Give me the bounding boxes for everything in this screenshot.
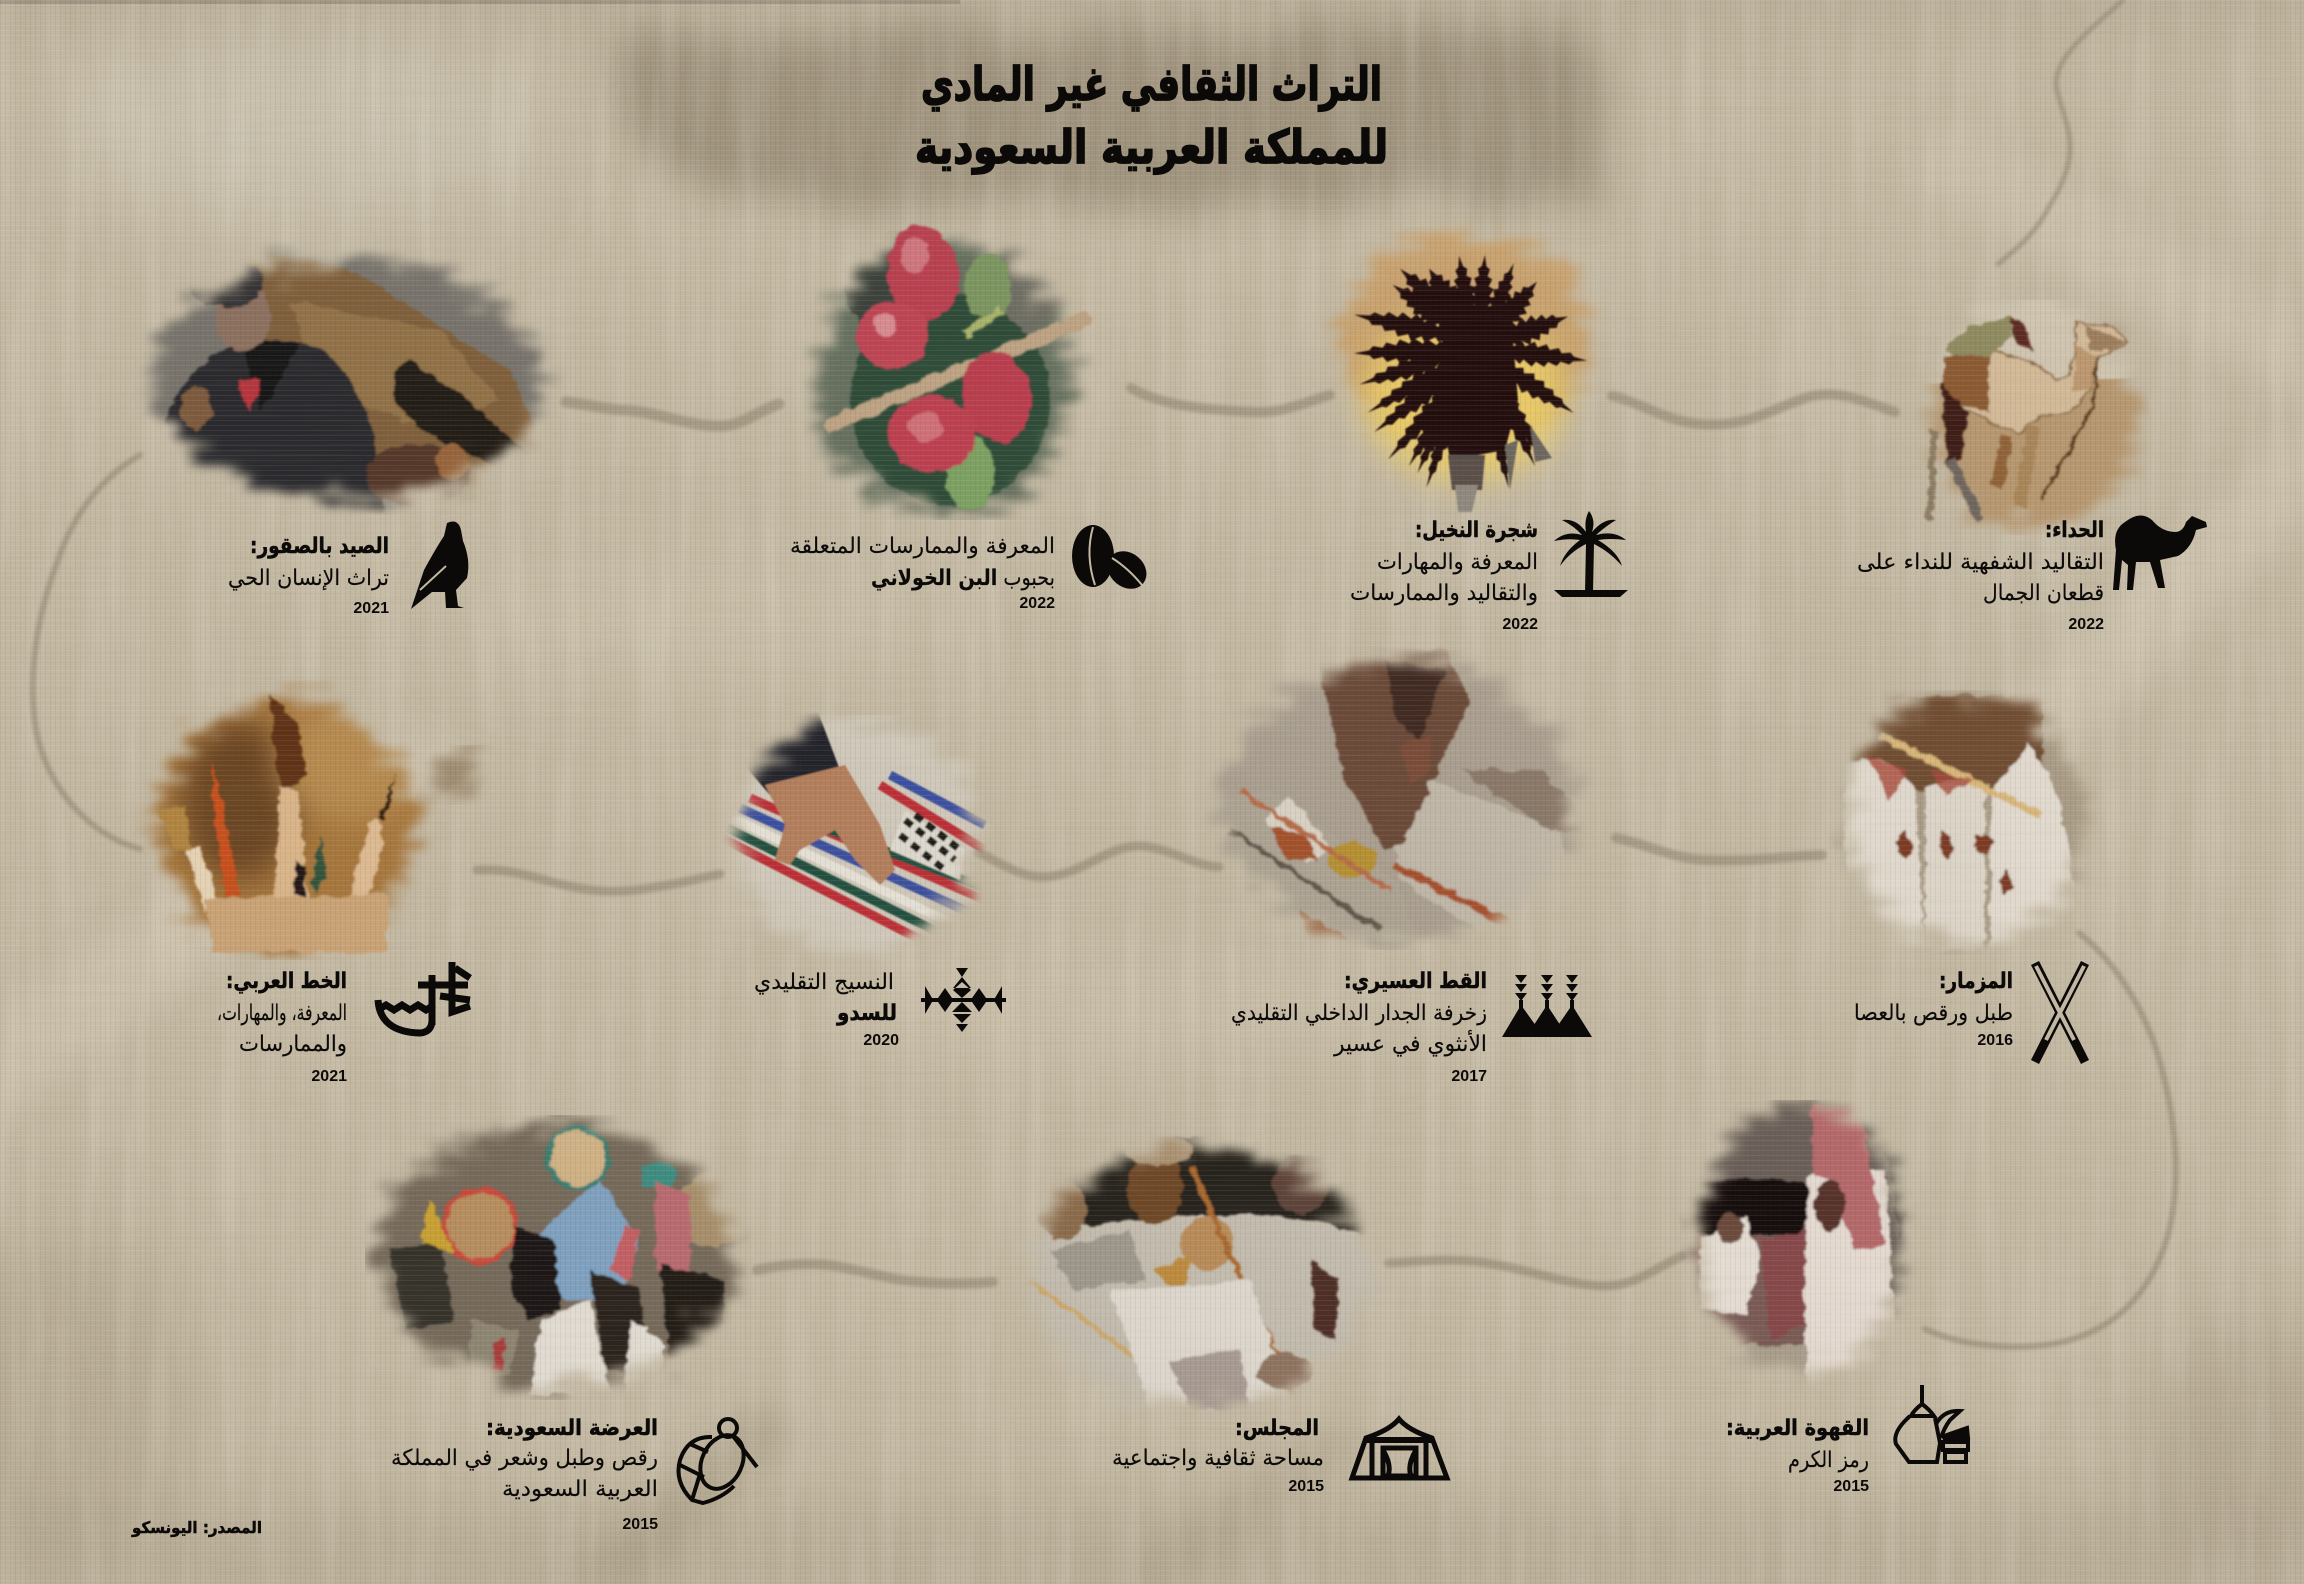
- block: Saudi Ardah: [391, 1416, 757, 1533]
- block: Al-Majlis: [1112, 1416, 1447, 1495]
- text: Al-Majlis: المجلس:: [1235, 1416, 1319, 1441]
- text: Al-Qatt Al-Asiri: [1231, 969, 1487, 1085]
- text: Khawlani coffee: [790, 534, 1055, 612]
- block: falconry: [228, 522, 468, 617]
- text: Al-Qatt Al-Asiri: زخرفة الجدار الداخلي التقليدي: [1231, 1001, 1487, 1026]
- icon: tent: [1352, 1419, 1447, 1478]
- block: Arabic coffee: [1726, 1385, 1968, 1495]
- text: Sadu weaving: للسدو: [836, 1001, 897, 1026]
- title: التراث الثقافي غير المادي: [921, 57, 1382, 111]
- icon: camel: [2113, 515, 2207, 590]
- painting: falconry: [130, 240, 580, 515]
- text: Al-Mizmar: 2016: [1977, 1032, 2013, 1049]
- text: falconry: تراث الإنسان الحي: [228, 566, 389, 591]
- text: Khawlani coffee: 2022: [1019, 595, 1055, 612]
- block: Al-Qatt Al-Asiri: [1231, 969, 1592, 1085]
- text: calligraphy: الخط العربي:: [226, 969, 347, 994]
- text: Al-Majlis: [1112, 1416, 1324, 1495]
- text: Arabic coffee: القهوة العربية:: [1726, 1416, 1869, 1441]
- icon: coffee beans: [1072, 525, 1154, 597]
- icon: palm: [1554, 511, 1628, 597]
- text: calligraphy: 2021: [311, 1068, 347, 1085]
- text: Saudi Ardah: [391, 1416, 658, 1533]
- text: falconry: الصيد بالصقور:: [250, 534, 389, 559]
- text: camel: التقاليد الشفهية للنداء على: [1857, 550, 2104, 575]
- text: Al-Mizmar: المزمار:: [1939, 969, 2013, 994]
- source note: المصدر: اليونسكو: [131, 1518, 262, 1537]
- text: Saudi Ardah: العربية السعودية: [502, 1477, 658, 1502]
- icon: falcon: [411, 522, 468, 609]
- painting: calligraphy pens: [130, 680, 481, 960]
- block: Sadu weaving: [754, 968, 1006, 1049]
- text: palm tree: شجرة النخيل:: [1415, 518, 1538, 543]
- text: Al-Mizmar: [1854, 969, 2013, 1049]
- painting: Al-Majlis: [1005, 1130, 1400, 1420]
- text: Al-Majlis: 2015: [1288, 1478, 1324, 1495]
- text: Sadu weaving: 2020: [863, 1032, 899, 1049]
- text: Sadu weaving: [754, 970, 899, 1049]
- block: palm tree: [1350, 511, 1628, 633]
- block: camel Al-Hida: [1857, 515, 2207, 633]
- text: Al-Qatt Al-Asiri: القط العسيري:: [1344, 969, 1487, 994]
- text: falconry: 2021: [353, 600, 389, 617]
- text: Al-Qatt Al-Asiri: 2017: [1451, 1068, 1487, 1085]
- painting: camel: [1919, 300, 2148, 535]
- icon: crossed sticks: [2035, 963, 2085, 1062]
- text: Al-Qatt Al-Asiri: الأنثوي في عسير: [1333, 1030, 1487, 1057]
- text: Arabic coffee: 2015: [1833, 1478, 1869, 1495]
- text: palm tree: 2022: [1502, 616, 1538, 633]
- text: Saudi Ardah: رقص وطبل وشعر في المملكة: [391, 1446, 658, 1471]
- connector path: [33, 0, 2176, 1347]
- block: Al-Mizmar: [1854, 963, 2085, 1062]
- text: Khawlani coffee: المعرفة والممارسات المتعلقة: [790, 534, 1055, 559]
- text: Saudi Ardah: 2015: [622, 1516, 658, 1533]
- text: Arabic coffee: رمز الكرم: [1788, 1448, 1869, 1473]
- text: falconry: [228, 534, 389, 617]
- painting: Saudi Ardah: [365, 1115, 760, 1400]
- text: camel: [1857, 518, 2104, 633]
- block: Khawlani coffee: [790, 525, 1154, 612]
- painting: Arabic coffee: [1680, 1100, 1920, 1390]
- block: calligraphy: [217, 962, 470, 1085]
- icon: calligraphy mark: [378, 962, 470, 1033]
- text: camel: قطعان الجمال: [1983, 581, 2104, 606]
- text: palm tree: المعرفة والمهارات: [1377, 550, 1538, 575]
- text: Sadu weaving: النسيج التقليدي: [754, 970, 894, 995]
- painting: Al-Mizmar: [1825, 690, 2115, 955]
- text: Arabic coffee: [1726, 1416, 1869, 1495]
- painting: Sadu weaving: [720, 712, 1000, 960]
- painting: Al-Qatt Al-Asiri: [1205, 645, 1625, 950]
- painting: palm tree: [1340, 235, 1590, 512]
- text: calligraphy: والممارسات: [239, 1032, 347, 1057]
- text: palm tree: والتقاليد والممارسات: [1350, 581, 1538, 606]
- text: calligraphy: المعرفة، والمهارات،: [217, 1001, 347, 1026]
- text: palm tree: [1350, 518, 1538, 633]
- icon: dallah and cups: [1895, 1385, 1968, 1462]
- text: Saudi Ardah: العرضة السعودية:: [486, 1416, 658, 1441]
- title: للمملكة العربية السعودية: [915, 120, 1388, 174]
- text: Al-Majlis: مساحة ثقافية واجتماعية: [1112, 1446, 1324, 1471]
- text: camel: 2022: [2068, 616, 2104, 633]
- text: Al-Mizmar: طبل ورقص بالعصا: [1854, 1001, 2013, 1026]
- text: Khawlani coffee: بحبوب البن الخولاني: [871, 566, 1055, 591]
- text: camel: الحداء:: [2045, 518, 2104, 543]
- painting: Khawlani coffee beans: [804, 223, 1093, 520]
- title: [915, 57, 1388, 174]
- text: calligraphy: [217, 969, 347, 1085]
- icon: triangles: [1502, 975, 1592, 1037]
- icon: drum: [678, 1419, 757, 1503]
- icon: Sadu pattern: [921, 968, 1006, 1032]
